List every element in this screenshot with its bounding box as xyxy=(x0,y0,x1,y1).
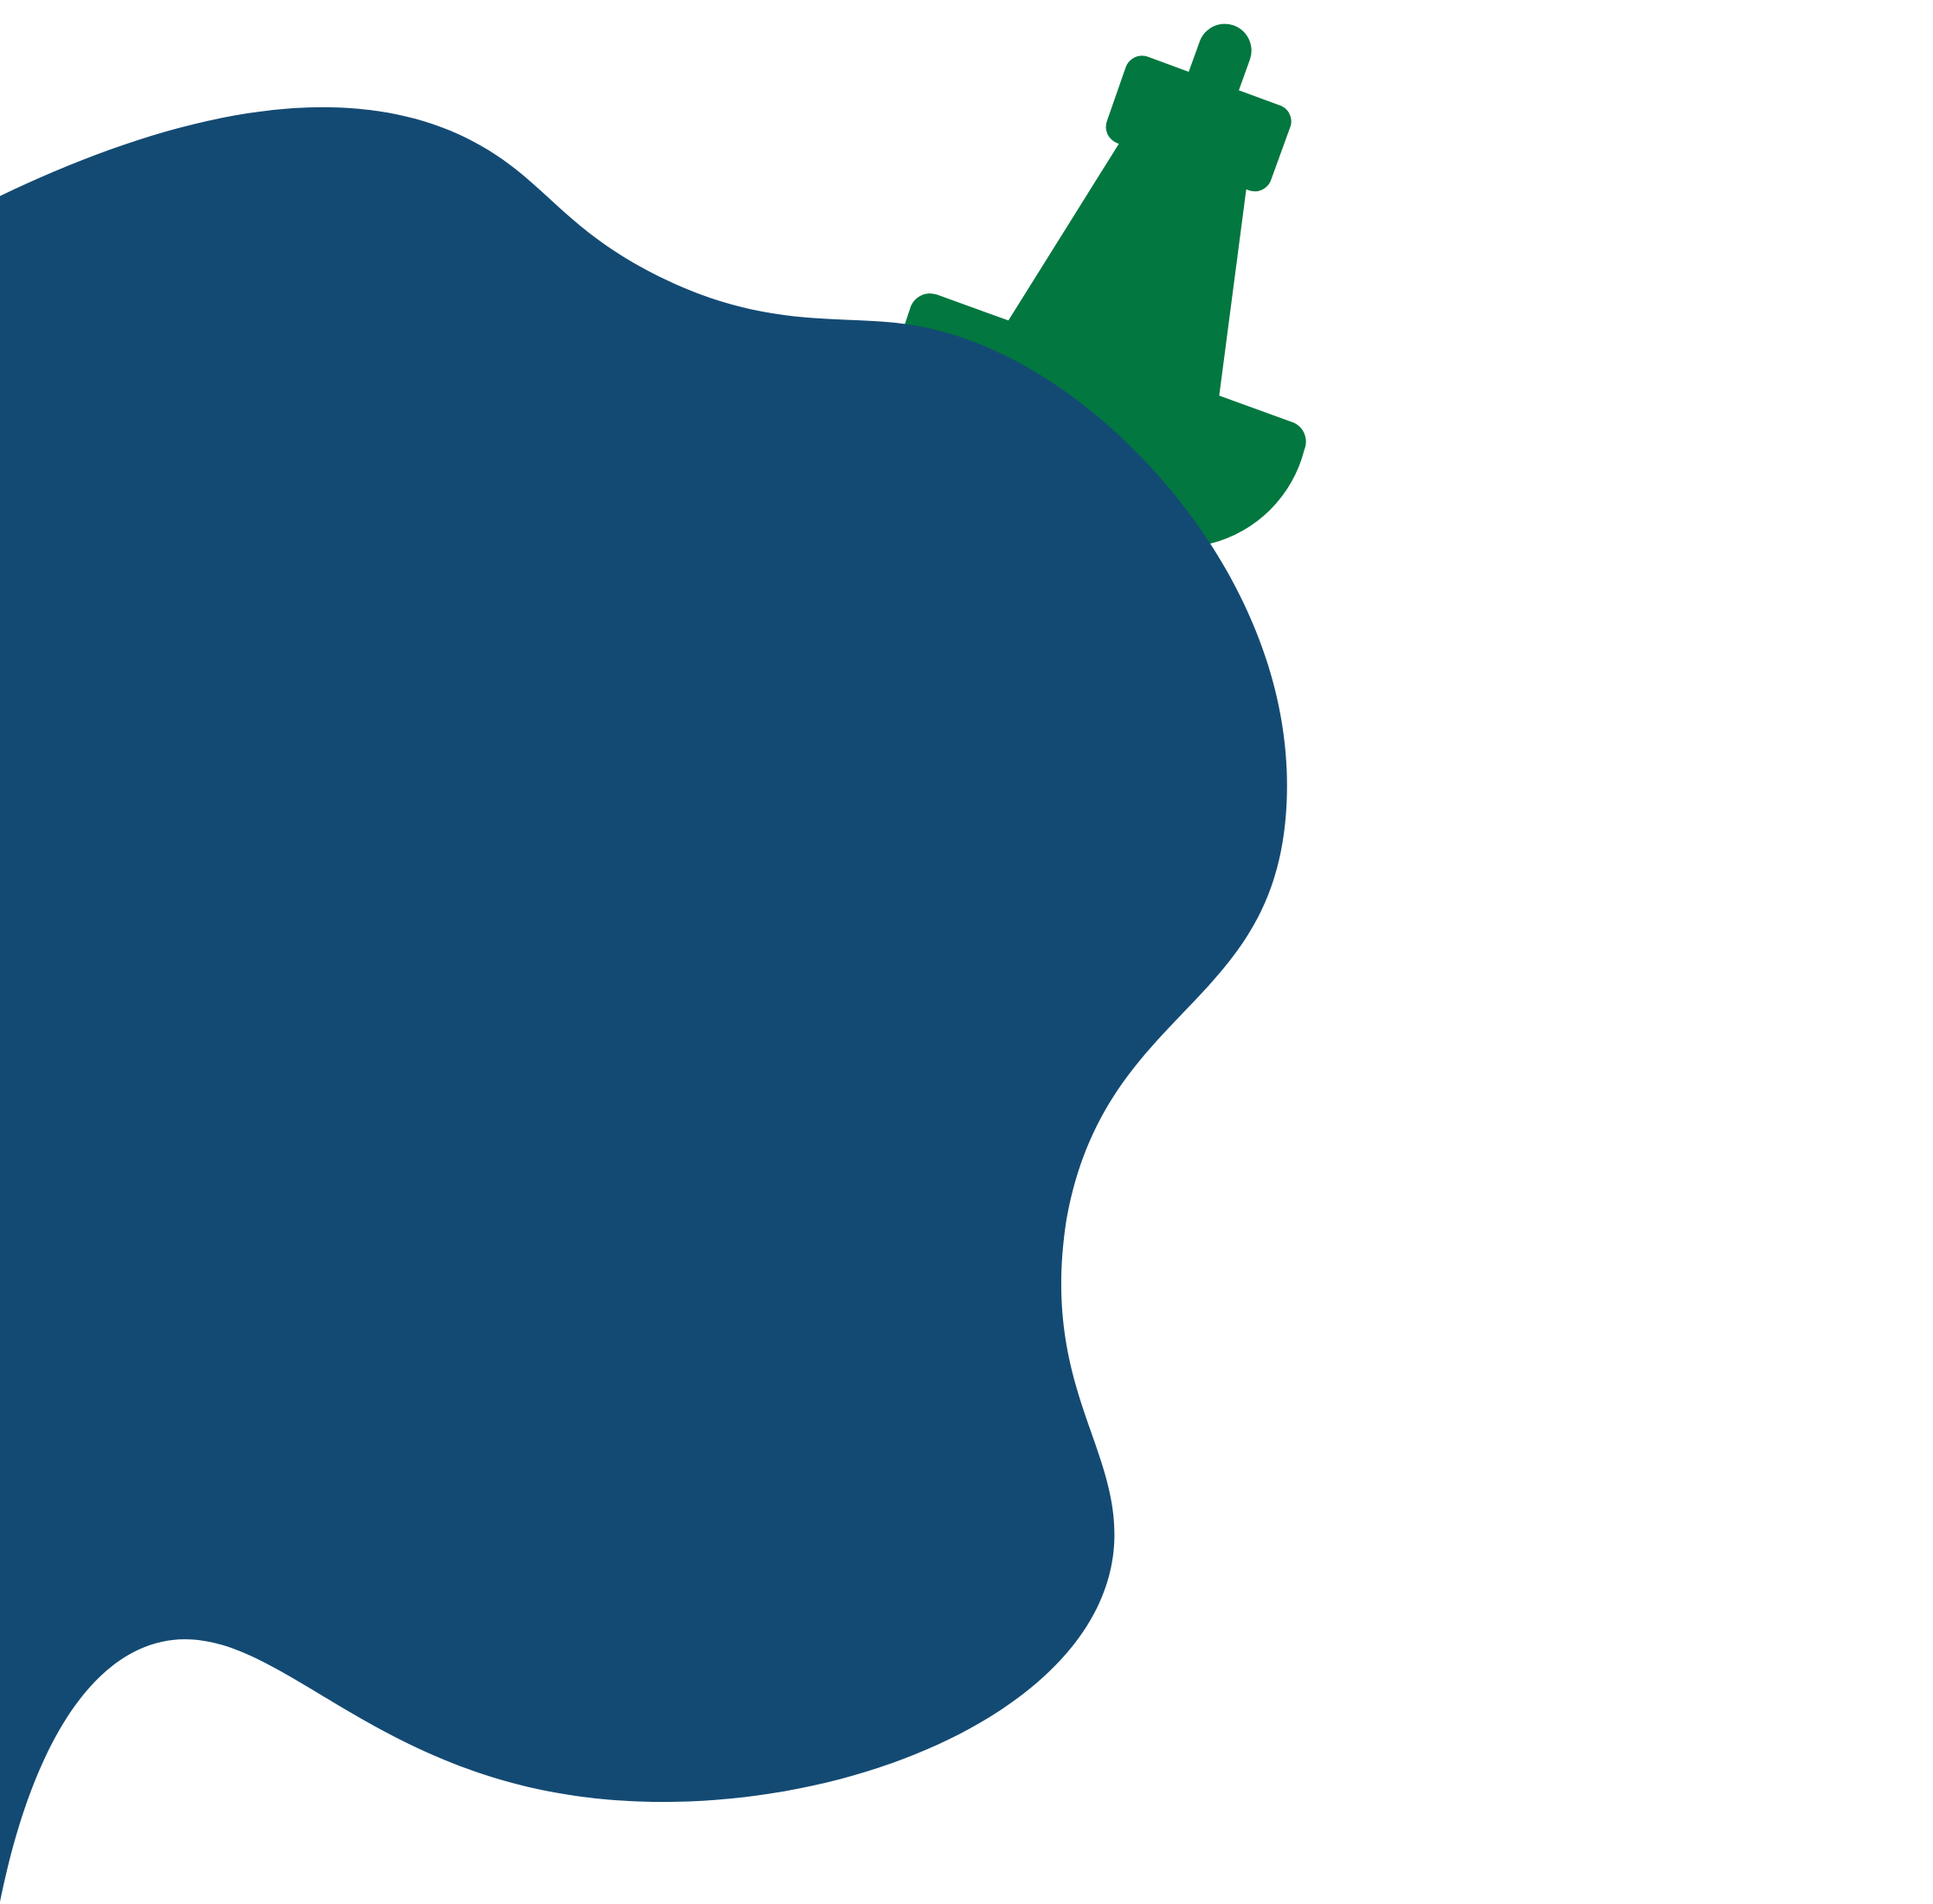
buoy body and base xyxy=(900,143,1306,592)
buoy finial xyxy=(1183,24,1252,123)
buoy cap xyxy=(1106,55,1292,191)
icon: green buoy xyxy=(900,24,1306,592)
blue blob panel xyxy=(0,107,1287,1901)
